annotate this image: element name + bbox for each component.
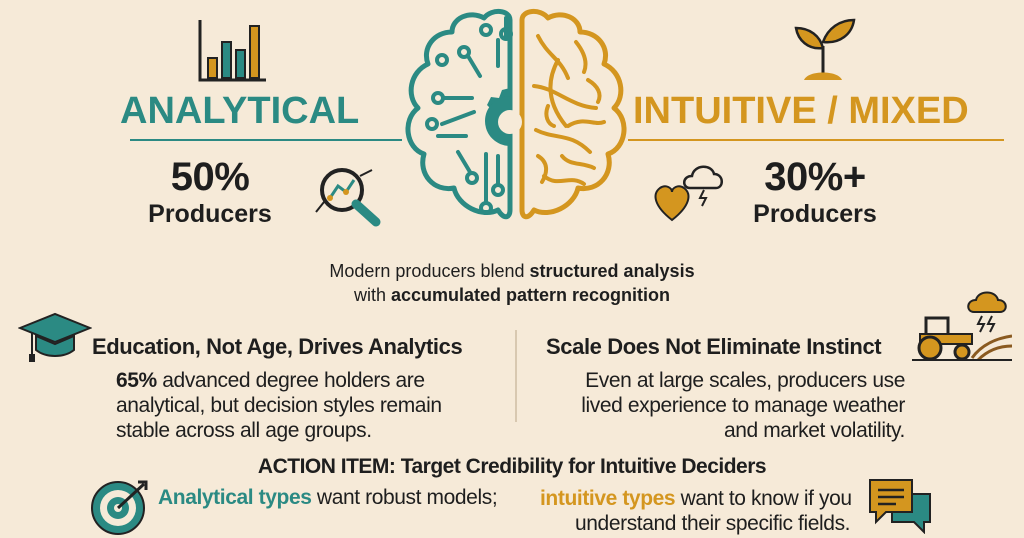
heading: ANALYTICAL: ANALYTICAL bbox=[120, 90, 359, 132]
text: scale body bbox=[581, 369, 906, 442]
icon: brain bbox=[405, 8, 627, 220]
text: scale body: Even at large scales, producers use bbox=[585, 369, 905, 392]
stat: 50% producers: 50% bbox=[171, 155, 249, 199]
text: education body: 65% advanced degree holders are bbox=[116, 369, 425, 392]
stat: 50% producers: Producers bbox=[148, 200, 272, 228]
text: analytical types: Analytical types want robust models; bbox=[158, 486, 497, 509]
horizontal divider line bbox=[130, 139, 402, 141]
action item heading: ACTION ITEM: Target Credibility for Intuitive Deciders bbox=[258, 455, 766, 478]
icon: sprout bbox=[794, 18, 856, 80]
stat: 50% producers bbox=[148, 155, 272, 228]
text: scale body: lived experience to manage weather bbox=[581, 394, 905, 417]
panel heading: education: Education, Not Age, Drives Analytics bbox=[92, 334, 462, 359]
icon: tractor and storm bbox=[912, 292, 1012, 361]
icon: magnifier bbox=[315, 168, 380, 226]
icon: target bbox=[91, 480, 148, 535]
heading: INTUITIVE / MIXED: INTUITIVE / MIXED bbox=[633, 90, 969, 132]
text: intuitive types: understand their specific fields. bbox=[575, 512, 850, 535]
icon: heart and cloud bbox=[654, 166, 723, 222]
stat: 30%+ producers: Producers bbox=[753, 200, 877, 228]
text: intuitive types bbox=[540, 487, 852, 535]
text: education body: analytical, but decision styles remain bbox=[116, 394, 442, 417]
stat: 30%+ producers bbox=[753, 155, 877, 228]
text: scale body: and market volatility. bbox=[724, 419, 905, 442]
icon: chat bubbles bbox=[869, 479, 931, 534]
icon: graduation cap bbox=[18, 312, 92, 362]
stat: 30%+ producers: 30%+ bbox=[764, 155, 866, 199]
text: intuitive types: intuitive types want to know if you bbox=[540, 487, 852, 510]
subtitle text: Modern producers blend structured analysis bbox=[329, 261, 695, 281]
panel heading: scale: Scale Does Not Eliminate Instinct bbox=[546, 334, 881, 359]
subtitle text: with accumulated pattern recognition bbox=[354, 285, 670, 305]
text: education body bbox=[116, 369, 442, 442]
icon: bar chart bbox=[198, 20, 266, 82]
subtitle text bbox=[329, 261, 695, 305]
text: education body: stable across all age groups. bbox=[116, 419, 372, 442]
